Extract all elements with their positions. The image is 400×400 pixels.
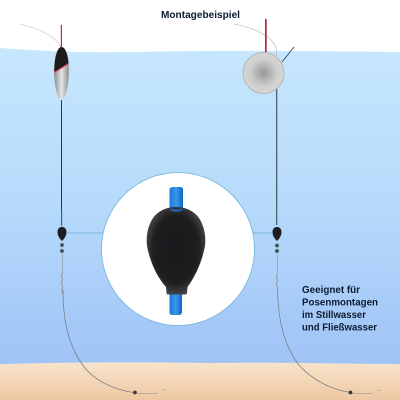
- right ball float: [243, 52, 284, 94]
- left rig: [20, 24, 166, 394]
- left float body: [54, 47, 69, 99]
- tube opening: [170, 208, 183, 212]
- left red antenna: [61, 25, 62, 49]
- right line above float: [234, 24, 277, 56]
- right leader line: [278, 290, 350, 392]
- right swivel beads: [275, 244, 279, 253]
- left leader line: [63, 290, 135, 392]
- right hook bead: [349, 391, 352, 394]
- left mini sinker: [57, 227, 67, 241]
- white circle: [102, 172, 254, 326]
- left float red band: [54, 64, 68, 72]
- right snap link: [276, 254, 278, 275]
- right stem: [276, 88, 277, 225]
- left snap link: [62, 254, 64, 274]
- suitability note: und Fließwasser: [302, 322, 377, 334]
- sand bed: [0, 362, 400, 400]
- left blue upper line: [60, 210, 63, 227]
- title: Montagebeispiel: [161, 10, 240, 21]
- water background: [0, 48, 400, 365]
- suitability note: Posenmontagen: [302, 298, 378, 308]
- right mini sinker: [272, 227, 282, 241]
- suitability note: im Stillwasser: [302, 310, 366, 321]
- bottom blue tube: [170, 292, 182, 315]
- connector lines: [66, 232, 273, 234]
- right rig: [234, 19, 381, 394]
- black sinker body: [147, 207, 205, 294]
- left swivel beads: [60, 243, 64, 253]
- left hook bead: [133, 391, 137, 394]
- left swivel: [61, 274, 63, 294]
- left hook: [136, 390, 166, 394]
- suitability note: Geeignet für: [302, 285, 360, 296]
- right swivel: [276, 275, 278, 290]
- right red antenna: [265, 19, 267, 52]
- left stem: [61, 100, 62, 225]
- top blue tube: [170, 187, 183, 213]
- left float black top: [54, 47, 68, 72]
- right hook: [352, 390, 381, 394]
- right dark antenna: [282, 47, 294, 62]
- left line above float: [20, 24, 61, 48]
- detail circle: [102, 172, 254, 326]
